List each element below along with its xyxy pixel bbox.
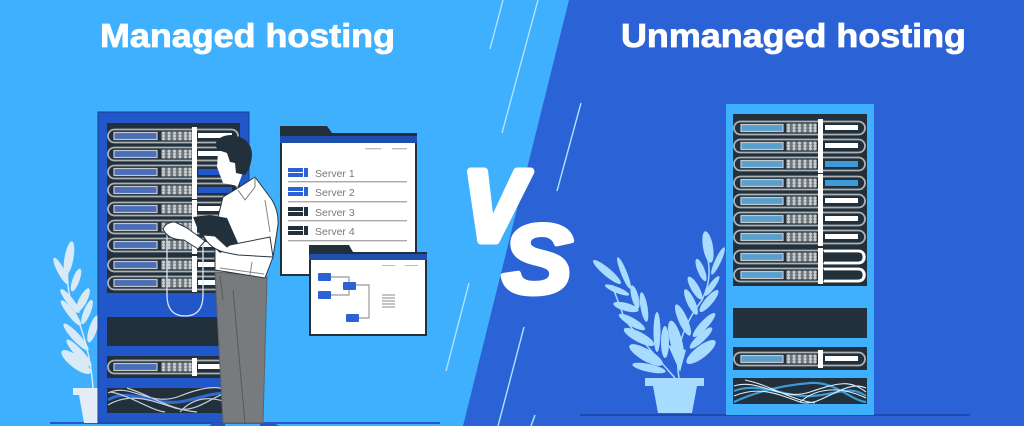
server row 1: Server 1 [315,168,355,180]
folder window: diagram [309,245,427,336]
ground line: right [580,414,970,416]
plant: left [51,240,101,423]
title: Unmanaged hosting: Unmanaged hosting [621,17,966,54]
ground line: left [50,422,440,424]
hair [215,135,252,175]
server row 1 [288,168,407,182]
folder window: server list [280,126,417,276]
face [217,150,243,186]
hand and sleeve [203,235,273,257]
person with tablet [163,135,279,426]
tablet [193,215,238,253]
diagonal accent lines [446,0,581,426]
VS emblem: S [502,205,573,314]
server row 3 [288,207,407,221]
server rack: left [98,112,249,423]
server row 3: Server 3 [315,207,355,219]
VS emblem [463,151,573,314]
title: Managed hosting: Managed hosting [100,17,395,54]
VS emblem: V [463,151,531,262]
server row 4 [288,226,407,241]
server row 2 [288,187,407,202]
shirt [215,177,278,278]
server rack: right [726,104,874,415]
plant: right [591,230,727,413]
arm and hand [163,222,205,249]
server row 4: Server 4 [315,226,355,238]
background: unmanaged side [463,0,1024,426]
server row 2: Server 2 [315,187,355,199]
